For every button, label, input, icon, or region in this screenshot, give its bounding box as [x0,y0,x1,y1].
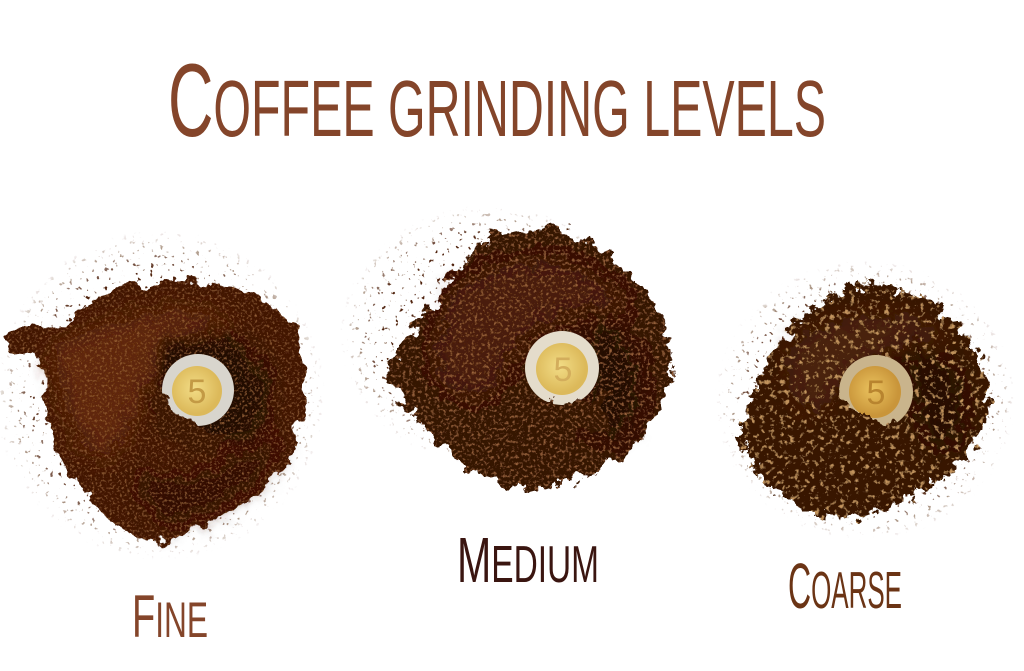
icon: coin [839,355,913,429]
scattered fine grounds [0,230,325,560]
fine coffee pile [2,281,306,540]
label: fine: FINE [132,583,208,650]
scattered medium grounds [340,205,640,465]
panel: fine grind [0,230,325,650]
label: coarse: COARSE [788,550,902,622]
grounds covering coin edge [152,380,226,455]
panel: coarse grind [715,260,1015,622]
icon: coin: 5 [188,373,206,411]
medium coffee pile [392,225,671,488]
panel: medium grind [340,205,671,596]
coarse coffee pile [742,285,989,518]
icon: coin [525,331,599,405]
label: medium: MEDIUM [457,524,599,596]
grounds covering coin edge [522,392,606,430]
icon: coin: 5 [554,351,572,389]
icon: coin: 5 [867,374,885,412]
scattered coarse grounds [715,260,1015,540]
grounds covering coin edge [834,392,912,450]
icon: coin [162,354,234,426]
